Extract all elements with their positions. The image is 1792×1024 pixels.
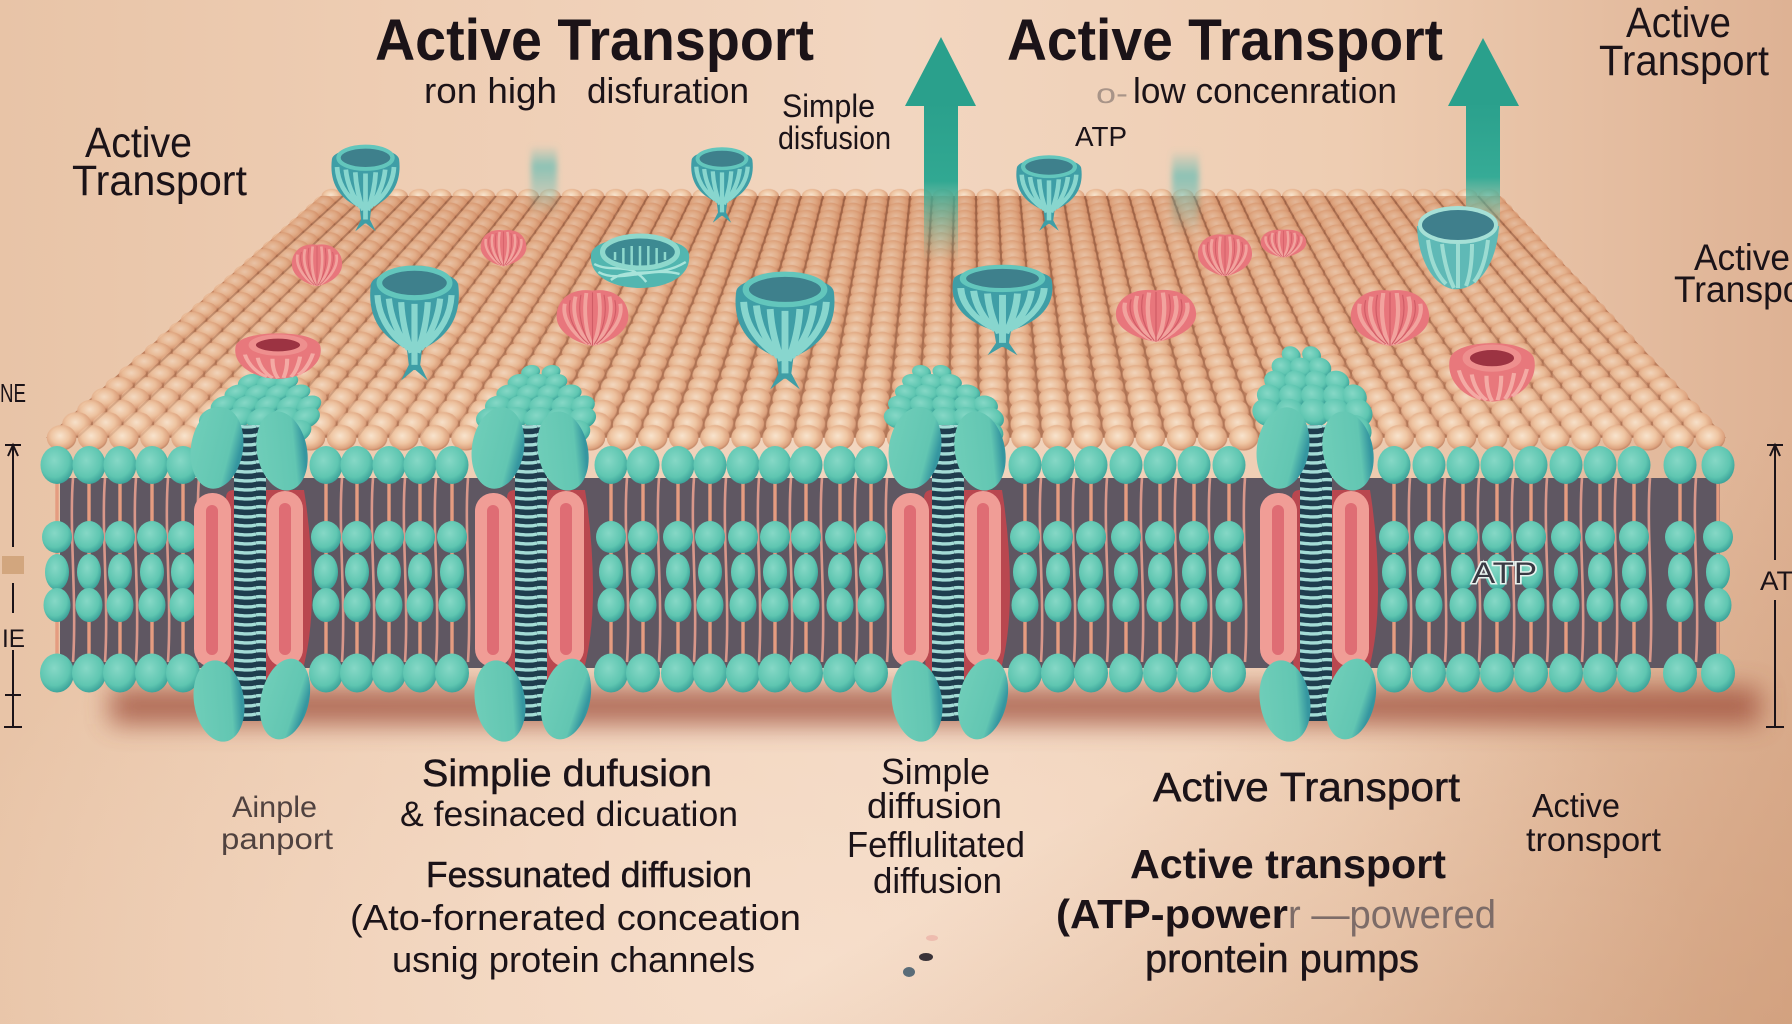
- text block: facilitated diffusion: Fessunated diffusion: [426, 854, 752, 895]
- label: active transport small: [1526, 787, 1661, 858]
- membrane top surface: phospholipid heads in perspective: [46, 189, 1726, 451]
- icon: pink donut protein d: [235, 333, 321, 379]
- icon: pink protein b: [481, 230, 526, 266]
- icon: teal ring protein: [591, 236, 689, 288]
- label: simple transport: Ainple: [232, 791, 317, 824]
- icon: teal cup protein 4: [736, 274, 834, 389]
- subtitle right: low concenration: [1133, 70, 1397, 111]
- text block: active transport atp-powered pumps: [1056, 841, 1496, 981]
- title right: Active Transport: [1007, 8, 1443, 73]
- label: simple diffusion top: Simple: [782, 88, 875, 124]
- text block: active transport atp-powered pumps: (ATP-power: [1056, 891, 1288, 937]
- label: ATP top: ATP: [1075, 121, 1127, 152]
- icon: teal cup protein 6: [953, 267, 1052, 355]
- text block: facilitated diffusion: (Ato-fornerated conceation: [350, 897, 801, 938]
- channel protein 1: [185, 365, 339, 745]
- label: active transport right: [1674, 237, 1792, 310]
- channel protein 4: [1243, 346, 1384, 745]
- text block: simple / facilitated diffusion center: Simple: [881, 751, 990, 792]
- faint streak 1: [531, 145, 557, 215]
- icon: pink protein c: [557, 290, 628, 346]
- text block: simple / facilitated diffusion center: diffusion: [873, 860, 1002, 901]
- label: active transport right: Active: [1694, 237, 1790, 278]
- text block: simple / facilitated diffusion center: diffusion: [867, 785, 1002, 826]
- label: simple transport: [221, 791, 334, 856]
- label: active transport bottom: Active Transport: [1153, 764, 1461, 810]
- text block: simple / facilitated diffusion center: Fefflulitated: [847, 824, 1025, 865]
- icon: pink donut protein i: [1449, 343, 1535, 402]
- icon: pink protein f: [1261, 230, 1306, 257]
- label: active transport left: Transport: [72, 157, 247, 205]
- subtitle right faint prefix: o-: [1096, 78, 1128, 109]
- lipid bilayer columns: [40, 446, 1735, 692]
- text block: active transport atp-powered pumps: prontein pumps: [1145, 937, 1419, 981]
- text block: simple / facilitated diffusion center: [847, 751, 1025, 901]
- icon: teal cup protein 5: [1016, 157, 1082, 231]
- text block: facilitated diffusion: usnig protein channels: [392, 939, 755, 980]
- label: ATP in membrane: ATP: [1472, 557, 1537, 590]
- subtitle left a: ron high: [424, 70, 557, 111]
- label: active transport left: [72, 119, 247, 205]
- text block: facilitated diffusion: [350, 854, 801, 980]
- label: active transport small: Active: [1532, 787, 1620, 824]
- icon: pink protein a: [292, 244, 342, 286]
- label: active transport top right: Transport: [1599, 37, 1769, 85]
- smudge marks: [903, 935, 938, 977]
- text block: active transport atp-powered pumps: r —powered: [1288, 893, 1496, 937]
- icon: pale teal cup protein: [1417, 208, 1499, 289]
- label: active transport left: Active: [85, 119, 192, 167]
- shadow under membrane: [110, 688, 1760, 724]
- subtitle left b: disfuration: [587, 70, 749, 111]
- text block: simple diffusion left: Simplie dufusion: [422, 753, 712, 795]
- icon: pink protein g: [1116, 290, 1196, 342]
- label: active transport top right: Active: [1626, 0, 1731, 47]
- label: active transport top right: [1599, 0, 1769, 85]
- right measurement bracket: [1766, 445, 1784, 727]
- label: clipped left NE: NE: [0, 378, 26, 408]
- faint streak 2: [1172, 150, 1199, 235]
- text block: simple diffusion left: [400, 753, 738, 834]
- channel protein 2: [466, 365, 605, 745]
- text block: simple diffusion left: & fesinaced dicuation: [400, 795, 738, 834]
- label: simple transport: panport: [221, 823, 334, 856]
- icon: pink protein e: [1198, 234, 1252, 276]
- icon: teal cup protein 2: [691, 149, 753, 223]
- left measurement bracket: [2, 445, 24, 727]
- text block: active transport atp-powered pumps: Active transport: [1130, 841, 1446, 887]
- channel protein 3: [873, 365, 1016, 745]
- icon: teal cup protein 3: [370, 268, 459, 381]
- icon: pink protein h: [1351, 290, 1429, 346]
- membrane interior background: [60, 478, 1720, 668]
- title left: Active Transport: [375, 8, 814, 73]
- arrow 2: [1448, 38, 1519, 240]
- label: active transport small: tronsport: [1526, 821, 1661, 858]
- label: simple diffusion top: [778, 88, 891, 156]
- arrow 1: [905, 37, 976, 263]
- icon: teal cup protein 1: [331, 147, 400, 231]
- label: simple diffusion top: disfusion: [778, 120, 891, 156]
- label: clipped left IE: IE: [2, 625, 25, 653]
